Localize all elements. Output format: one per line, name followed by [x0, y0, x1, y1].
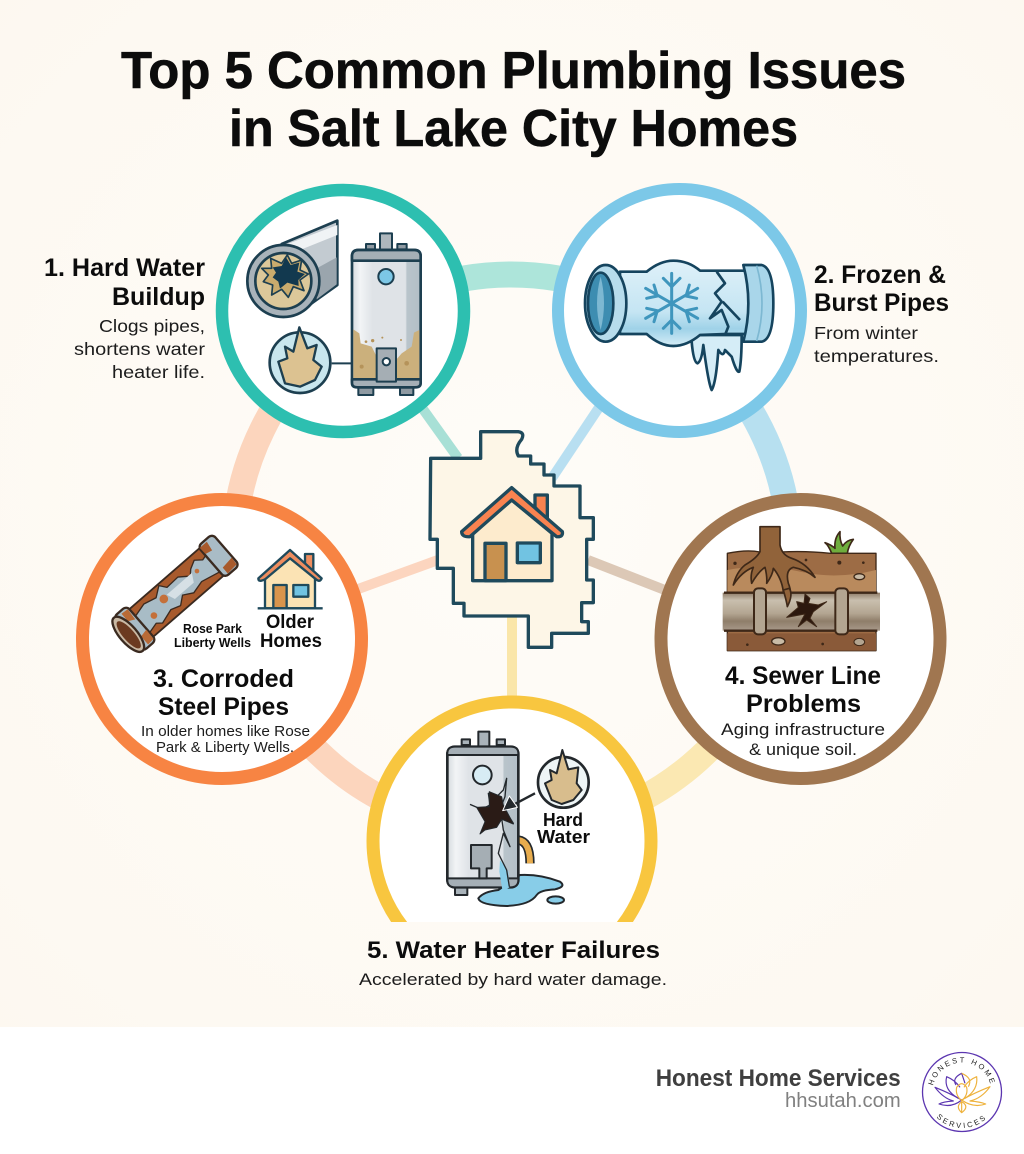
- label: neighborhoods: [174, 622, 251, 650]
- description 1: heater life.: [112, 362, 205, 382]
- label: hard water: Water: [537, 827, 590, 847]
- central map with house icon: [430, 432, 593, 647]
- description 3: [141, 723, 310, 756]
- footer brand name: [656, 1065, 901, 1112]
- description 5: Accelerated by hard water damage.: [359, 970, 667, 989]
- heading 3: 3. Corroded: [153, 665, 294, 693]
- spokes: [350, 400, 670, 705]
- description 1: Clogs pipes,: [99, 316, 205, 336]
- circle frame 3: [82, 500, 362, 778]
- heading 4: Problems: [746, 690, 861, 718]
- label: older homes: Older: [266, 611, 314, 633]
- label: older homes: [260, 611, 322, 652]
- heading 1: 1. Hard Water: [44, 254, 205, 282]
- footer brand name: hhsutah.com: [785, 1090, 901, 1112]
- connector line: [332, 360, 367, 366]
- icon: frozen burst pipe: [585, 261, 773, 390]
- heading 4: [725, 662, 881, 718]
- footer brand name: Honest Home Services: [656, 1065, 901, 1092]
- panel: 5 water heater failures: [359, 702, 667, 989]
- logo: [922, 1052, 1002, 1132]
- heading 1: [44, 254, 205, 311]
- circle frame 5: [366, 696, 658, 922]
- description 1: [74, 316, 205, 382]
- heading 2: Burst Pipes: [814, 289, 949, 317]
- label: neighborhoods: Rose Park: [183, 622, 242, 636]
- description 4: [721, 720, 885, 759]
- description 2: [814, 323, 939, 366]
- heading 3: Steel Pipes: [158, 693, 289, 721]
- circle frame 1: [222, 190, 464, 432]
- heading 5: 5. Water Heater Failures: [367, 937, 660, 964]
- icon: sewer pipe with roots: [723, 527, 880, 651]
- connecting ring: [234, 274, 790, 807]
- panel: 1 hard water buildup: [44, 190, 464, 432]
- icon: snowflake: [646, 273, 698, 333]
- circle frame 2: [558, 189, 801, 432]
- description 4: Aging infrastructure: [721, 720, 885, 739]
- heading 3: [153, 665, 294, 721]
- title: in Salt Lake City Homes: [229, 100, 798, 158]
- label: hard water: [537, 810, 590, 847]
- logo: SERVICES: [937, 1114, 985, 1128]
- description 1: shortens water: [74, 339, 205, 359]
- label: hard water: Hard: [543, 810, 583, 830]
- circle frame 4: [661, 500, 940, 778]
- title: Top 5 Common Plumbing Issues: [121, 42, 906, 100]
- heading 2: 2. Frozen &: [814, 261, 946, 289]
- icon: cracked water heater: [447, 732, 589, 906]
- label: neighborhoods: Liberty Wells: [174, 636, 251, 650]
- heading 4: 4. Sewer Line: [725, 662, 881, 690]
- description 2: From winter: [814, 323, 918, 343]
- footer band: [0, 1027, 1024, 1154]
- icon: clogged pipe and water heater: [247, 221, 421, 395]
- panel: 4 sewer line problems: [661, 500, 940, 778]
- logo: HONEST HOME: [928, 1057, 995, 1086]
- title: [121, 42, 906, 158]
- label: older homes: Homes: [260, 630, 322, 652]
- description 3: In older homes like Rose: [141, 723, 310, 740]
- icon: corroded pipe: [107, 532, 241, 657]
- icon: older home: [258, 550, 323, 608]
- panel: 2 frozen and burst pipes: [558, 189, 949, 432]
- description 3: Park & Liberty Wells.: [156, 739, 294, 756]
- heading 2: [814, 261, 949, 317]
- description 4: & unique soil.: [749, 740, 857, 759]
- panel: 3 corroded steel pipes: [82, 500, 362, 778]
- icon: house: [462, 488, 562, 581]
- description 2: temperatures.: [814, 346, 939, 366]
- heading 1: Buildup: [112, 283, 205, 311]
